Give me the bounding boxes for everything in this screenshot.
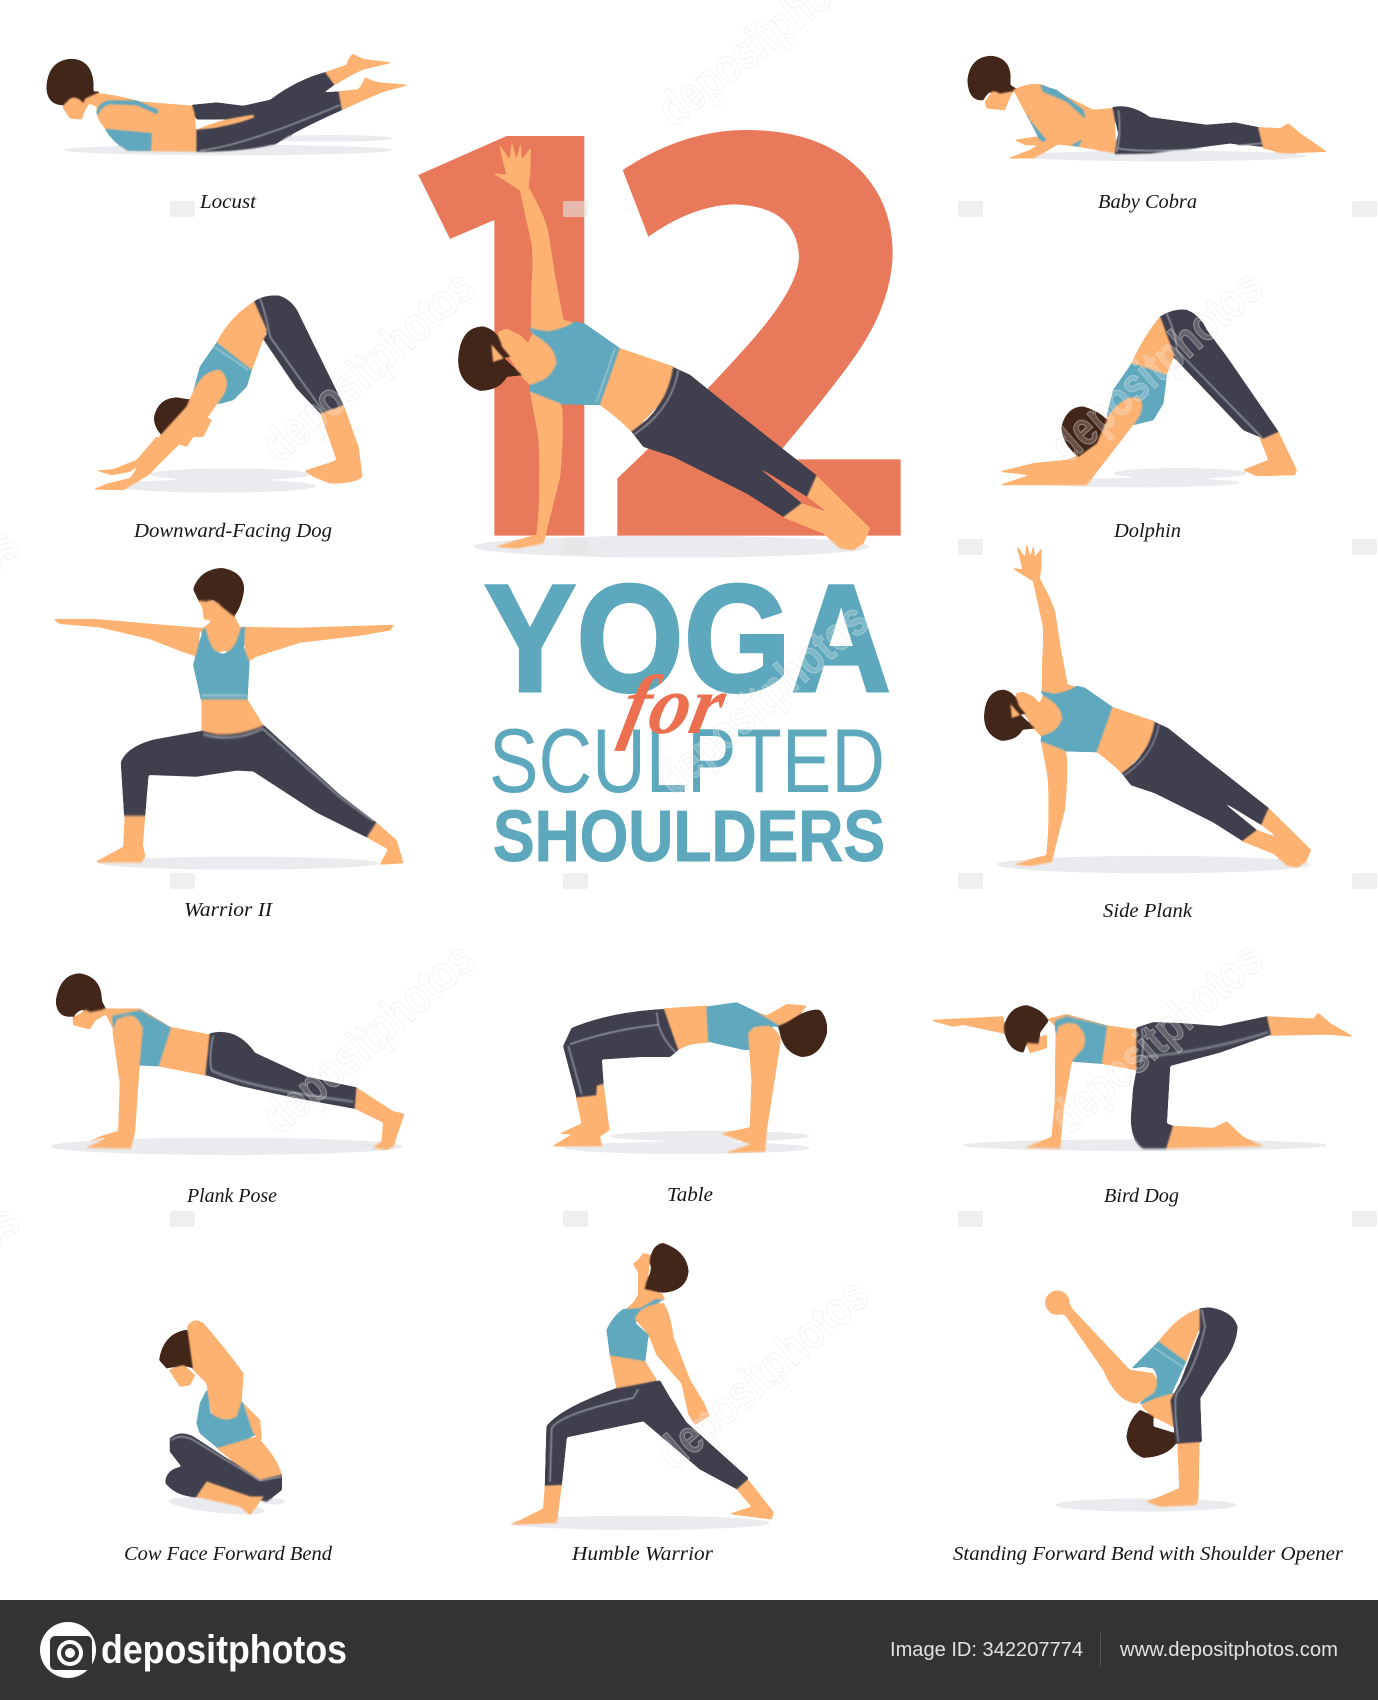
pose: side plank bbox=[984, 544, 1311, 922]
website: www.depositphotos.com bbox=[1119, 1639, 1338, 1661]
title word: YOGA: YOGA bbox=[484, 553, 891, 724]
footer bar bbox=[0, 1600, 1378, 1700]
image id: Image ID: 342207774 bbox=[890, 1639, 1083, 1661]
logo wordmark: depositphotos bbox=[101, 1628, 347, 1672]
pose: humble warrior bbox=[510, 1243, 773, 1565]
figure: warrior II bbox=[53, 568, 403, 870]
watermark: depositphotos bbox=[646, 593, 879, 805]
pose: cow face forward bend bbox=[124, 1321, 333, 1565]
figure: table bbox=[553, 1002, 827, 1154]
pose: dolphin bbox=[1000, 310, 1297, 542]
label: Cow Face Forward Bend: Cow Face Forward Bend bbox=[124, 1543, 333, 1565]
label: Baby Cobra: Baby Cobra bbox=[1098, 191, 1197, 213]
label: Bird Dog: Bird Dog bbox=[1104, 1185, 1179, 1207]
pose: warrior II bbox=[53, 568, 403, 921]
watermark: depositphotos bbox=[252, 260, 485, 472]
figure: dolphin bbox=[1000, 310, 1297, 487]
icon: camera logo bbox=[40, 1622, 96, 1678]
figure: standing forward bend bbox=[1045, 1291, 1237, 1512]
pose: bird dog bbox=[930, 1005, 1353, 1207]
pose: baby cobra bbox=[968, 56, 1327, 213]
title word: for: for bbox=[614, 659, 735, 752]
pose: downward-facing dog bbox=[93, 296, 362, 542]
pose: locust bbox=[47, 54, 408, 213]
watermark: depositphotos bbox=[1040, 932, 1273, 1144]
title word: SCULPTED: SCULPTED bbox=[489, 711, 885, 812]
figure: cow face forward bend bbox=[159, 1321, 285, 1518]
label: Humble Warrior: Humble Warrior bbox=[571, 1543, 713, 1565]
figure: baby cobra bbox=[968, 56, 1327, 161]
label: Standing Forward Bend with Shoulder Opener: Standing Forward Bend with Shoulder Opener bbox=[953, 1543, 1343, 1565]
label: Warrior II: Warrior II bbox=[184, 899, 273, 921]
figure: side plank bbox=[984, 544, 1311, 873]
label: Locust: Locust bbox=[199, 191, 256, 213]
label: Downward-Facing Dog: Downward-Facing Dog bbox=[133, 520, 332, 542]
label: Plank Pose: Plank Pose bbox=[186, 1185, 277, 1207]
pose: standing forward bend with shoulder opener bbox=[953, 1291, 1343, 1565]
figure: plank bbox=[50, 974, 404, 1155]
watermark: depositphotos bbox=[646, 1268, 879, 1480]
label: Side Plank: Side Plank bbox=[1103, 900, 1193, 922]
pose: plank bbox=[50, 974, 404, 1207]
figure: humble warrior bbox=[510, 1243, 773, 1530]
title word: SHOULDERS: SHOULDERS bbox=[493, 797, 885, 877]
label: Dolphin: Dolphin bbox=[1113, 520, 1181, 542]
figure: locust bbox=[47, 54, 408, 155]
pose: table bbox=[553, 1002, 827, 1206]
watermark: depositphotos bbox=[1040, 260, 1273, 472]
label: Table: Table bbox=[667, 1184, 713, 1206]
watermark: depositphotos bbox=[252, 932, 485, 1144]
figure: downward-facing dog bbox=[93, 296, 362, 493]
big number 12 bbox=[418, 130, 901, 536]
title bbox=[484, 553, 891, 877]
main figure: side plank over the number bbox=[458, 142, 870, 558]
figure: bird dog bbox=[930, 1005, 1353, 1151]
